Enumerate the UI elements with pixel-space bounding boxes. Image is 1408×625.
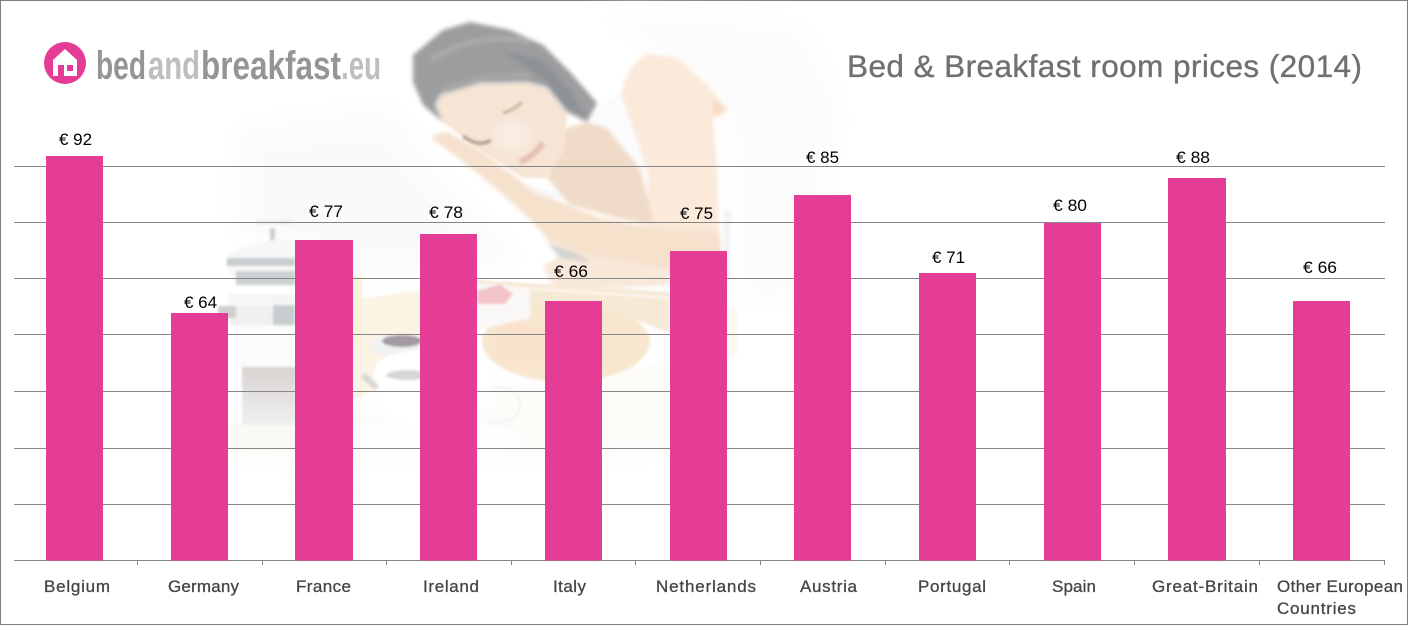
value labels: € 64 — [184, 293, 217, 312]
logo wordmark: and — [148, 44, 200, 88]
jam bowl — [370, 334, 422, 358]
breakfast tray — [340, 275, 738, 460]
value labels: € 75 — [680, 204, 713, 223]
logo wordmark — [96, 44, 381, 88]
icon: pink house — [44, 42, 86, 84]
value labels: € 66 — [554, 262, 588, 281]
logo wordmark: .eu — [341, 44, 381, 88]
value labels: € 71 — [932, 248, 965, 267]
coffee press — [218, 219, 296, 453]
value labels — [59, 130, 1337, 312]
category labels: France — [296, 577, 351, 596]
category labels: Other European — [1277, 577, 1403, 596]
value labels: € 88 — [1176, 148, 1210, 167]
logo wordmark: breakfast — [201, 44, 341, 88]
category labels: Germany — [168, 577, 240, 596]
woman under-arm body — [523, 182, 730, 292]
category labels: Austria — [800, 577, 858, 596]
category labels: Great-Britain — [1152, 577, 1258, 596]
raspberry dish — [477, 284, 530, 330]
category labels: Countries — [1277, 599, 1356, 618]
woman hair — [413, 22, 597, 122]
background photo: woman sleeping with breakfast tray — [218, 10, 840, 460]
orange juice glass — [353, 275, 362, 348]
woman shoulder and chest — [433, 54, 730, 280]
coffee cup — [340, 350, 520, 460]
plate with croissant — [480, 302, 670, 387]
category labels: Spain — [1052, 577, 1096, 596]
value labels: € 85 — [806, 148, 839, 167]
value labels: € 78 — [429, 203, 463, 222]
gridlines — [14, 166, 1385, 565]
category labels: Portugal — [918, 577, 986, 596]
category labels: Netherlands — [656, 577, 756, 596]
value labels: € 66 — [1303, 258, 1337, 277]
bar chart — [44, 130, 1403, 618]
category labels: Ireland — [423, 577, 479, 596]
logo — [44, 42, 381, 88]
category labels — [44, 577, 1403, 618]
bars — [46, 156, 1350, 560]
bedding shading — [230, 10, 840, 460]
value labels: € 92 — [59, 130, 92, 149]
value labels: € 77 — [309, 202, 343, 221]
title: Bed & Breakfast room prices (2014) — [847, 48, 1362, 84]
woman face — [435, 82, 567, 178]
category labels: Italy — [553, 577, 586, 596]
category labels: Belgium — [44, 577, 110, 596]
logo wordmark: bed — [96, 44, 146, 88]
value labels: € 80 — [1053, 196, 1087, 215]
